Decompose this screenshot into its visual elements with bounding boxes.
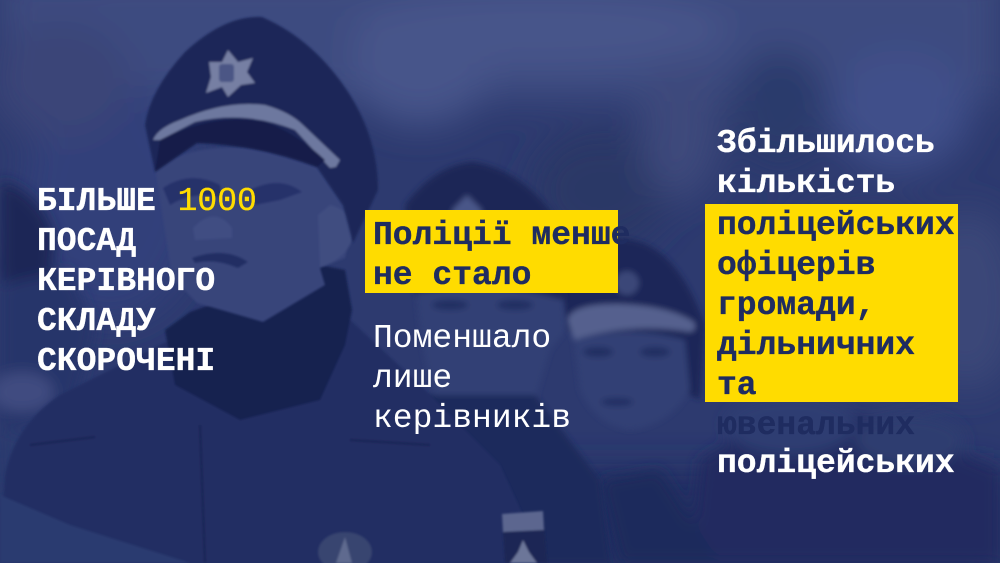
centre callout text xyxy=(373,217,630,294)
right text block xyxy=(717,125,955,482)
officer three xyxy=(555,238,705,430)
main officer cap xyxy=(145,17,378,243)
centre yellow callout xyxy=(365,210,618,293)
centre body text: керівників xyxy=(373,400,571,437)
right text block: ювенальних xyxy=(717,407,915,444)
right yellow callout xyxy=(705,204,958,402)
left headline: СКОРОЧЕНІ xyxy=(37,343,215,380)
right text block: кількість xyxy=(717,165,895,202)
right text block: та xyxy=(717,367,757,404)
centre body text: лише xyxy=(373,360,452,397)
far officers on the right xyxy=(600,395,1000,563)
centre body text xyxy=(373,320,571,437)
officer two xyxy=(405,162,610,563)
main officer face xyxy=(155,147,354,322)
left headline: ПОСАД xyxy=(37,223,136,260)
main officer jacket xyxy=(0,265,545,563)
centre body text: Поменшало xyxy=(373,320,551,357)
left headline xyxy=(37,183,257,380)
left headline: КЕРІВНОГО xyxy=(37,263,215,300)
right text block: Збільшилось xyxy=(717,125,935,162)
right text block: дільничних xyxy=(717,327,915,364)
left headline: СКЛАДУ xyxy=(37,303,156,340)
right text block: офіцерів xyxy=(717,247,875,284)
right text block: поліцейських xyxy=(717,207,955,244)
background crowd on the left xyxy=(0,180,95,500)
centre callout text: Поліції менше xyxy=(373,217,630,254)
uniform patch xyxy=(318,511,547,563)
right text block: поліцейських xyxy=(717,445,955,482)
right text block: громади, xyxy=(717,287,875,324)
left headline: БІЛЬШЕ 1000 xyxy=(37,183,257,220)
centre callout text: не стало xyxy=(373,257,531,294)
